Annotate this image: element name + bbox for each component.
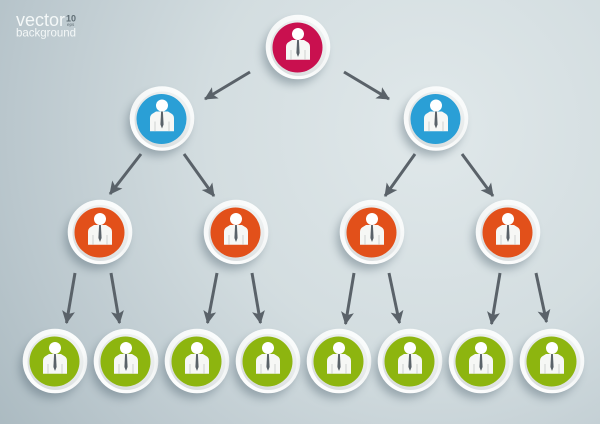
node: green 5 [304, 329, 371, 398]
node: green 8 [516, 329, 584, 398]
node: green 6 [374, 329, 442, 398]
logo text: vector 10 eps background: vector [16, 10, 65, 30]
node: blue left [126, 86, 194, 156]
node: orange 4 [472, 200, 540, 270]
node: green 2 [90, 329, 158, 398]
node: orange 1 [64, 200, 132, 270]
node: orange 2 [200, 200, 268, 270]
node: blue right [400, 86, 468, 156]
node: green 3 [162, 329, 229, 398]
logo text: vector 10 eps background: eps [67, 22, 75, 27]
node: green 4 [232, 329, 300, 398]
node: green 1 [20, 329, 87, 398]
node: orange 3 [336, 200, 404, 270]
logo text: vector 10 eps background [16, 10, 76, 40]
node: green 7 [446, 329, 513, 398]
node: top (crimson) [262, 15, 330, 85]
arrows [66, 72, 546, 324]
logo text: vector 10 eps background: background [16, 26, 76, 40]
logo text: vector 10 eps background: 10 [66, 14, 76, 24]
